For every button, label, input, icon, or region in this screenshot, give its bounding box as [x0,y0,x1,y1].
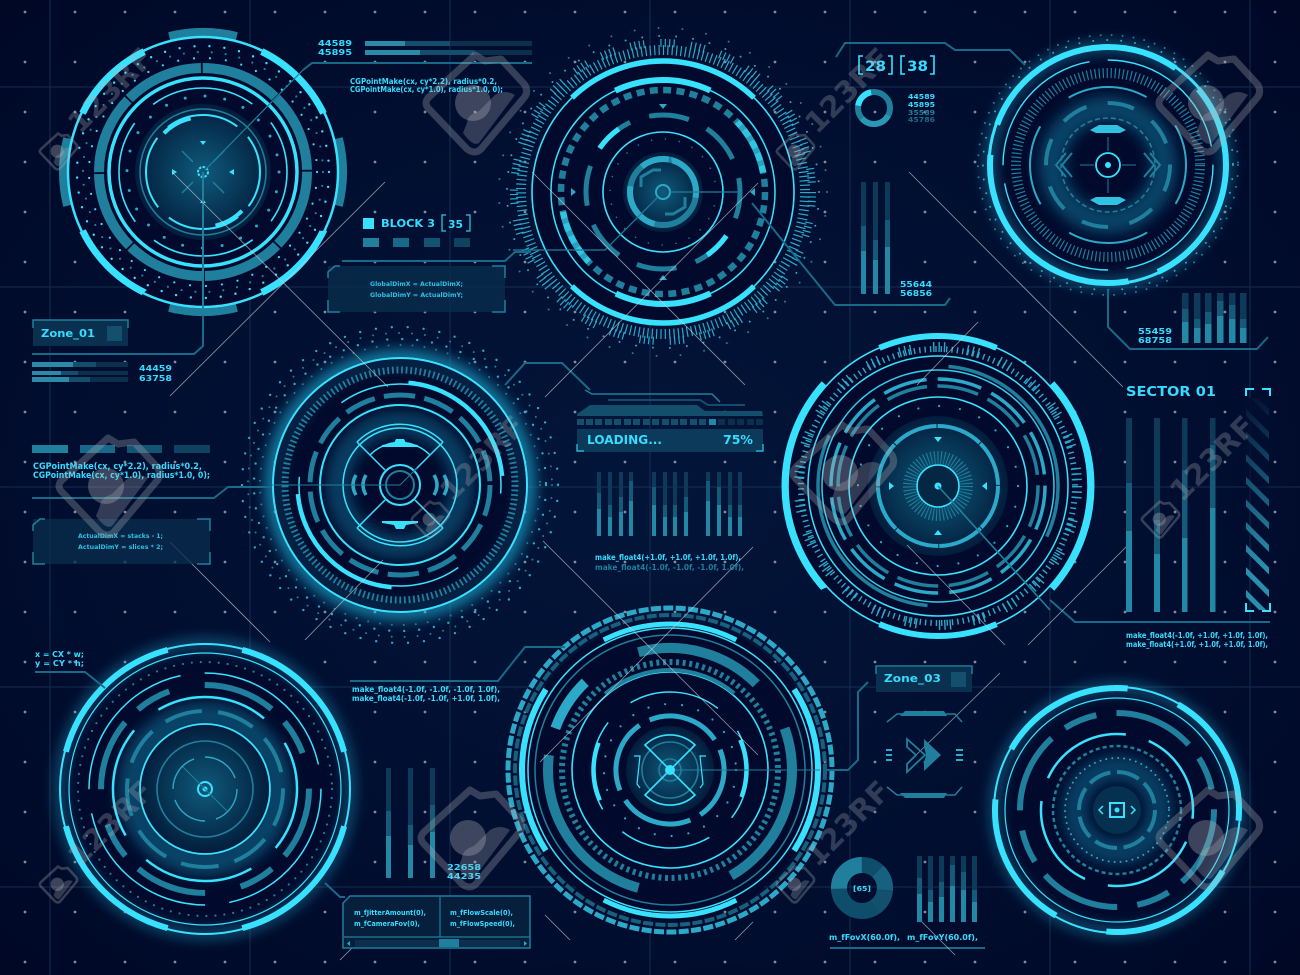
pie gauge: [65] [853,885,871,893]
scroll panel [343,896,530,948]
double segments [831,379,1045,593]
code text: x y: x = CX * w; [35,650,84,659]
readout: top numbers and bars: 44589 [318,39,353,48]
dashes [310,395,490,575]
glow [995,688,1239,932]
tick ring [562,662,778,878]
watermarks: 123RF [1163,409,1262,508]
watermarks: 123RF [61,774,160,873]
thick dim arcs [808,356,1068,616]
bar chart: right readout: 68758 [1138,336,1173,345]
inner ring [603,132,723,252]
readout: numbers: 35589 [908,109,935,117]
scattered dots [507,36,819,348]
mid arcs [600,700,740,840]
circle HUD 8: bottom right [950,643,1284,975]
loading panel: LOADING... [587,433,662,447]
rings [89,673,321,905]
thin bright rings [808,356,1068,616]
dashed outer ring [508,608,832,932]
outer bright ring [465,565,875,975]
block 3 label: BLOCK 3 [381,217,435,230]
glow [990,47,1226,283]
watermarks: 123RF [798,41,897,140]
spikes circle HUD 2: top centre [478,7,848,377]
circle HUD 5: centre right [722,270,1154,702]
centre sectors [272,424,457,546]
code text: left: CGPointMake(cx, cy*2.2), radius*0.2, [33,462,202,472]
outer bright ring [950,643,1284,975]
bar chart: sector 01 [1126,418,1216,612]
bar chart: top right [861,182,932,298]
sector 01 heading: SECTOR 01 [1126,385,1216,400]
code text: left [33,462,210,481]
crosshair [172,70,303,315]
glow [60,644,350,934]
readout: numbers: 45786 [908,116,935,124]
code text: top: CGPointMake(cx, cy*1.0), radius*1.0, 0); [350,85,503,94]
readout: zone 01 bars: 63758 [139,374,172,383]
bar chart: loading [597,472,742,536]
outer bright ring [722,270,1154,702]
code text: fov: m_fFovX(60.0f), [829,933,900,942]
centre target [889,437,1050,610]
readout: top numbers and bars [318,39,532,57]
block 3 label: 35 [448,218,463,231]
bright arcs [259,344,541,626]
side chevrons [1056,153,1160,177]
segment bars left [32,445,210,453]
icon: double chevron [886,711,963,798]
triangles [571,104,755,280]
zone 03 label: Zone_03 [884,672,941,685]
circle HUD 3: top right [942,0,1274,331]
zone 01 label: Zone_01 [41,327,95,340]
readout: zone 01 bars [32,362,172,383]
mid arcs [556,85,770,299]
centre disc [140,724,270,854]
square ring [561,90,765,294]
inner bright rings [86,55,320,289]
segmented ring [99,68,307,276]
circle HUD 6: bottom left [29,613,381,965]
watermarks: 123RF [61,41,160,140]
glow [272,357,528,613]
readout: numbers [908,93,935,124]
code text: loading: make_float4(+1.0f, +1.0f, +1.0f, 1.0f), [595,553,741,562]
outer bright ring [24,0,382,351]
code text: sector 01: make_float4(+1.0f, +1.0f, +1.0f, 1.0f), [1126,640,1268,649]
code text: sector 01: make_float4(-1.0f, +1.0f, +1.0f, 1.0f), [1126,631,1268,640]
watermarks: 123RF [798,774,897,873]
code text: loading [595,553,744,572]
code box: GlobalDim: GlobalDimY = ActualDimY; [370,291,463,299]
readout: top numbers and bars: 45895 [318,48,353,57]
rings [1020,713,1214,907]
outer bright ring [478,7,848,377]
readout: numbers: 44589 [908,93,935,101]
loading panel [577,390,763,452]
code box: ActualDim: ActualDimX = stacks - 1; [78,532,163,540]
zone 01 label [33,320,128,346]
tick ring [285,370,515,600]
rings [572,672,768,868]
readout: numbers: 45895 [908,101,935,109]
top and bottom caps [1090,125,1126,205]
pie gauge [829,855,895,921]
code box: GlobalDim [328,266,505,312]
bar chart: right readout [1138,293,1246,345]
bar chart: right readout: 55459 [1138,327,1173,336]
bar chart: top right: 56856 [900,289,932,298]
scroll panel: m_fJitterAmount(0), [354,909,426,917]
outer tabs [33,2,373,342]
code text: sector 01 [1126,631,1268,649]
code text: bottom centre: make_float4(-1.0f, -1.0f, +1.0f, 1.0f), [352,694,500,703]
code text: bottom centre [352,685,500,703]
readout: zone 01 bars: 44459 [139,364,172,373]
centre icon [1093,786,1141,834]
outer bright ring [273,358,527,612]
code text: fov: m_fFovY(60.0f), [907,933,978,942]
code box: ActualDim [33,519,210,564]
centre disc and cross [626,726,820,814]
loading panel: 75% [723,433,753,447]
code box: GlobalDim: GlobalDimX = ActualDimX; [370,280,463,288]
bracket counters 28 38 [859,56,934,75]
centre disc [135,104,271,240]
bar chart: bottom: 22658 [447,863,482,872]
scroll panel: m_fFlowScale(0), [450,909,513,917]
circle HUD 4: centre left [242,327,558,643]
outer bright ring [29,613,381,965]
centre disc [868,416,1008,556]
outer dots [978,35,1238,295]
circle HUD 7: bottom centre [465,565,875,975]
outer bright ring [942,0,1274,331]
circle HUD 1: top left [24,0,382,351]
inner dots [127,96,279,248]
thin dim ring [535,635,805,905]
radial spikes [514,43,812,341]
tick ring [799,347,1077,625]
code text: loading: make_float4(-1.0f, -1.0f, -1.0f, 1.0f), [595,563,744,572]
scroll panel: m_fFlowSpeed(0), [450,920,515,928]
dotted ring [78,662,332,916]
hatched gauge [1246,389,1270,611]
donut gauge [852,86,896,130]
code box: ActualDim: ActualDimY = slices * 2; [78,543,163,551]
thick dim arcs [514,614,826,926]
second ring [514,43,812,341]
code text: bottom centre: make_float4(-1.0f, -1.0f, -1.0f, 1.0f), [352,685,500,694]
code text: fov [829,933,978,942]
code text: x y [35,650,84,668]
bar chart: bottom right [917,856,977,922]
scroll panel: m_fCameraFov(0), [354,920,420,928]
bracket counters 28 38: 28 [865,59,886,75]
centre bright arcs [123,92,283,252]
watermarks: 123RF [433,409,532,508]
ticks and rings [1003,60,1213,270]
centre target [183,767,227,811]
dotted field [77,46,329,298]
code text: top: CGPointMake(cx, cy*2.2), radius*0.2, [350,77,497,86]
code text: top [350,77,503,94]
bracket counters 28 38: 38 [907,59,928,75]
centre [1096,153,1120,177]
bar chart: top right: 55644 [900,280,932,289]
centre disc [623,152,703,232]
zone 03 label [876,666,972,692]
code text: left: CGPointMake(cx, cy*1.0), radius*1.0, 0); [33,471,210,481]
code text: x y: y = CY * h; [35,659,84,668]
block 3 label [363,215,470,247]
thin diagonal lines [170,172,1128,960]
dots ring [858,406,1018,566]
bar chart: bottom: 44235 [447,872,482,881]
dotted halo [242,327,558,643]
bar chart: bottom [386,768,482,881]
